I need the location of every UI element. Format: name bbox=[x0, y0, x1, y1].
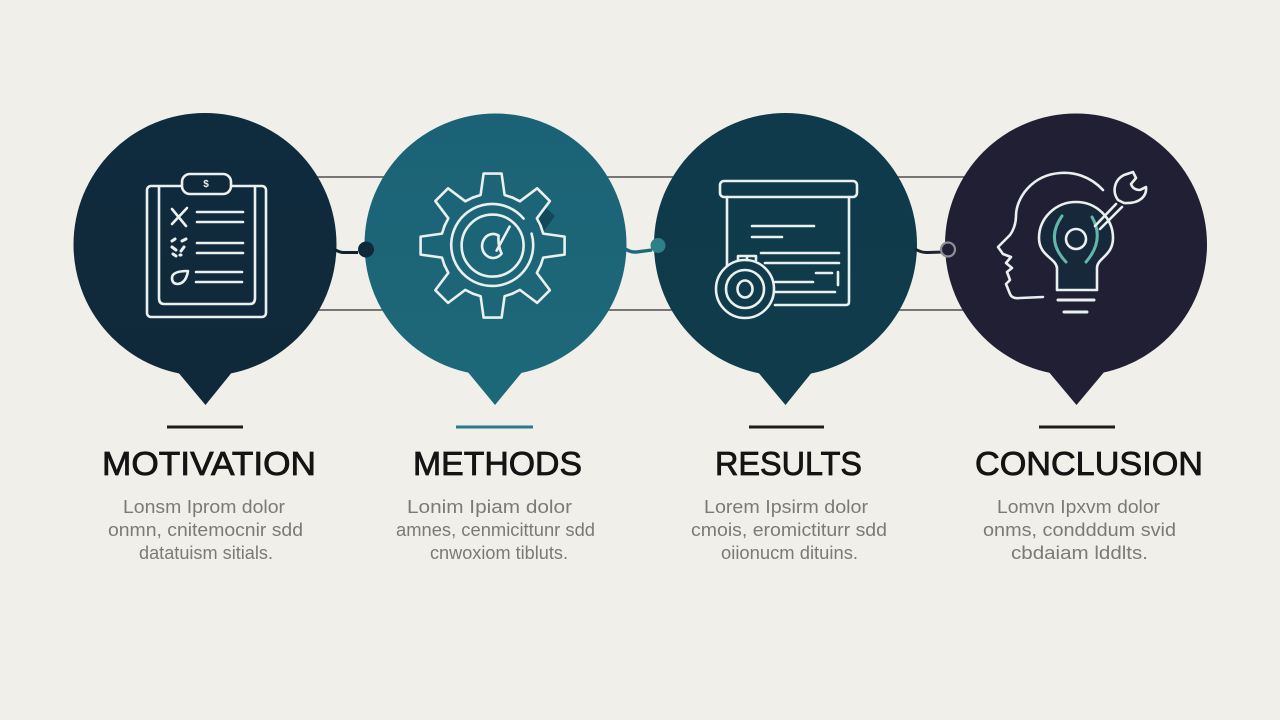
accent bar bbox=[456, 426, 533, 428]
heading: METHODS bbox=[413, 445, 582, 482]
description bbox=[691, 496, 887, 563]
panel: motivation badge bbox=[74, 113, 336, 405]
description: oiionucm dituins. bbox=[721, 542, 858, 563]
board text lines bbox=[752, 226, 839, 292]
description: onms, condddum svid bbox=[983, 519, 1176, 540]
icon detail: cross mark bbox=[172, 208, 187, 226]
step: conclusion text bbox=[975, 426, 1203, 563]
description: Lonim Ipiam dolor bbox=[407, 496, 572, 517]
top connector line bbox=[300, 176, 980, 178]
checklist lines bbox=[196, 212, 243, 282]
icon: gear with target bbox=[421, 174, 565, 318]
icon detail: target bbox=[716, 256, 774, 318]
icon: head with lightbulb and wrench bbox=[998, 172, 1146, 312]
bulb base lines bbox=[1058, 300, 1094, 312]
icon: clipboard bbox=[147, 174, 266, 317]
step: motivation text bbox=[102, 426, 316, 563]
description bbox=[396, 496, 595, 563]
step: methods text bbox=[396, 426, 595, 563]
icon detail: gear shadow notch bbox=[537, 207, 555, 232]
connector: results to conclusion bbox=[915, 242, 955, 256]
step: results text bbox=[691, 426, 887, 563]
heading: CONCLUSION bbox=[975, 445, 1203, 482]
heading: RESULTS bbox=[715, 445, 862, 482]
description bbox=[108, 496, 303, 563]
description: Lorem Ipsirm dolor bbox=[704, 496, 868, 517]
head outline bbox=[998, 173, 1103, 298]
connector: methods to results bbox=[624, 238, 666, 253]
description: datatuism sitials. bbox=[139, 542, 273, 563]
bottom connector line bbox=[300, 309, 980, 311]
accent bar bbox=[749, 426, 824, 428]
icon: presentation board with target bbox=[716, 181, 857, 318]
description bbox=[983, 496, 1176, 563]
icon detail: clip dollar mark: $ bbox=[203, 179, 209, 190]
description: cnwoxiom tibluts. bbox=[430, 542, 568, 563]
panel: conclusion badge bbox=[945, 114, 1207, 405]
description: Lomvn Ipxvm dolor bbox=[997, 496, 1160, 517]
description: Lonsm Iprom dolor bbox=[123, 496, 285, 517]
description: amnes, cenmicittunr sdd bbox=[396, 519, 595, 540]
icon detail: drop mark bbox=[172, 271, 188, 284]
description: cmois, eromictiturr sdd bbox=[691, 519, 887, 540]
connector: motivation to methods bbox=[334, 242, 374, 258]
accent bar bbox=[1039, 426, 1115, 428]
accent bar bbox=[167, 426, 243, 428]
icon detail: teal arcs bbox=[1054, 216, 1097, 262]
bulb bbox=[1039, 202, 1113, 290]
panel: methods badge bbox=[364, 114, 626, 405]
wrench bbox=[1095, 172, 1146, 229]
panel: results badge bbox=[654, 113, 917, 405]
heading: MOTIVATION bbox=[102, 445, 316, 482]
description: cbdaiam lddlts. bbox=[1011, 542, 1148, 563]
icon detail: scattered mark bbox=[172, 239, 186, 256]
description: onmn, cnitemocnir sdd bbox=[108, 519, 303, 540]
